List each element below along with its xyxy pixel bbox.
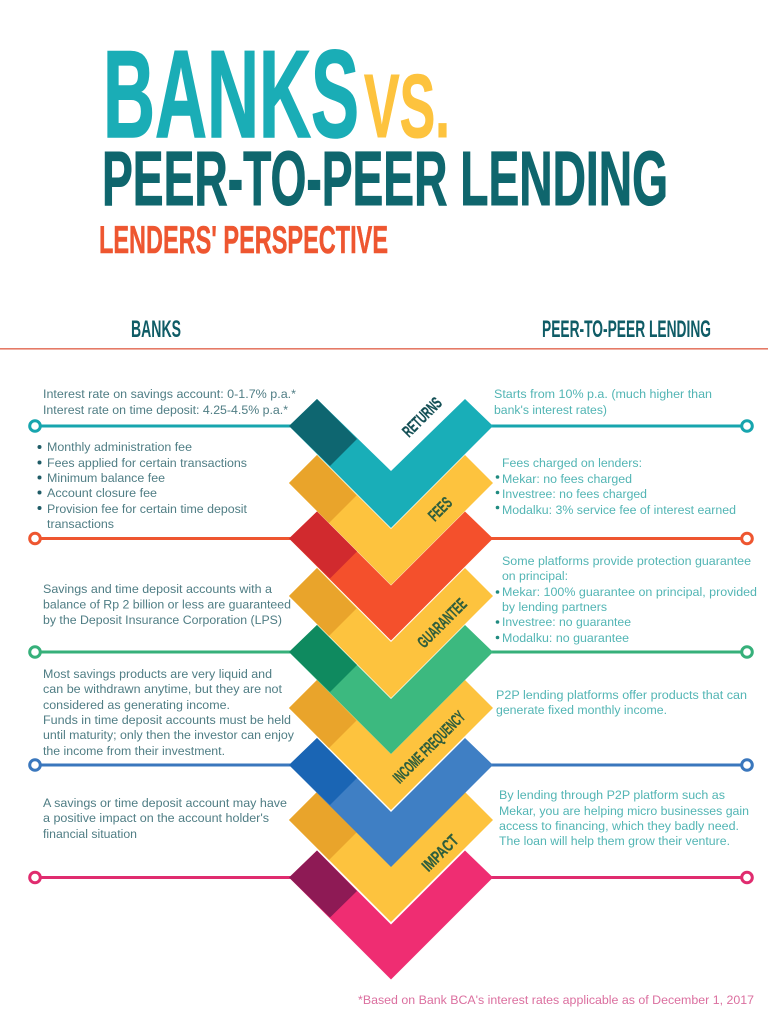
p2p text: fees: Fees charged on lenders:: [502, 456, 642, 470]
banks text: impact: financial situation: [43, 827, 137, 841]
banks text: income frequency: the income from their investment.: [43, 744, 225, 758]
p2p text: fees: Investree: no fees charged: [502, 487, 647, 501]
connector lines: income frequency: [30, 760, 752, 770]
banks text: fees: Minimum balance fee: [47, 471, 165, 485]
chevron: fees, yellow: [289, 455, 493, 585]
banks text: returns: [43, 387, 296, 417]
title line: Banks: BANKS: [103, 26, 359, 164]
p2p text: guarantee: by lending partners: [502, 600, 607, 614]
p2p text: returns: bank's interest rates): [494, 403, 607, 417]
banks text: returns: Interest rate on savings account: 0-1.7% p.a.*: [43, 387, 296, 401]
chevron: impact, pink: [289, 850, 493, 980]
connector lines: impact: [30, 872, 752, 883]
p2p text: guarantee: on principal:: [502, 569, 568, 583]
banks text: fees: Account closure fee: [47, 486, 157, 500]
p2p text: income frequency: generate fixed monthly income.: [496, 703, 667, 717]
banks text: income frequency: Most savings products are very liquid and: [43, 667, 272, 681]
chevron: guarantee, yellow: [289, 568, 493, 698]
p2p text: impact: access to financing, which they badly need.: [499, 819, 739, 833]
banks text: income frequency: can be withdrawn anytime, but they are not: [43, 682, 283, 696]
banks text: guarantee: by the Deposit Insurance Corporation (LPS): [43, 613, 282, 627]
p2p text: fees: Mekar: no fees charged: [502, 472, 632, 486]
banks text: impact: A savings or time deposit account may have: [43, 796, 287, 810]
p2p text: income frequency: [496, 688, 747, 717]
p2p text: income frequency: P2P lending platforms offer products that can: [496, 688, 747, 702]
column heading: banks: BANKS: [131, 316, 181, 343]
connector lines: fees: [30, 533, 752, 544]
p2p text: guarantee: [496, 554, 757, 645]
banks text: income frequency: Funds in time deposit accounts must be held: [43, 713, 291, 727]
banks text: fees: [38, 440, 248, 531]
banks text: fees: transactions: [47, 517, 114, 531]
banks text: income frequency: considered as generating income.: [43, 698, 230, 712]
banks text: returns: Interest rate on time deposit: 4.25-4.5% p.a.*: [43, 403, 288, 417]
chevron: income frequency, yellow: [289, 680, 493, 810]
banks text: guarantee: [43, 582, 291, 627]
p2p text: returns: Starts from 10% p.a. (much higher than: [494, 387, 712, 401]
chevron label: fees: FEES: [425, 494, 456, 525]
banks text: fees: Fees applied for certain transactions: [47, 456, 247, 470]
subtitle: LENDERS' PERSPECTIVE: [99, 219, 388, 262]
chevron: income frequency, blue: [289, 738, 493, 867]
banks text: guarantee: balance of Rp 2 billion or less are guaranteed: [43, 598, 291, 612]
banks text: income frequency: [43, 667, 295, 758]
chevron label: returns: RETURNS: [399, 394, 446, 441]
title word: vs.: VS.: [364, 57, 450, 157]
chevron: impact, yellow: [289, 792, 493, 922]
banks text: fees: Monthly administration fee: [47, 440, 192, 454]
banks text: income frequency: until maturity; only then the investor can enjoy: [43, 728, 295, 742]
banks text: fees: Provision fee for certain time deposit: [47, 502, 248, 516]
banks text: impact: [43, 796, 287, 841]
chevron: guarantee, green: [289, 625, 493, 754]
title: [99, 26, 668, 262]
chevron: fees, red-orange: [289, 512, 493, 640]
footnote: *Based on Bank BCA's interest rates applicable as of December 1, 2017: [358, 993, 754, 1007]
banks text: impact: a positive impact on the account holder's: [43, 811, 269, 825]
p2p text: fees: [496, 456, 736, 517]
p2p text: impact: [499, 788, 749, 848]
banks text: guarantee: Savings and time deposit accounts with a: [43, 582, 272, 596]
p2p text: guarantee: Mekar: 100% guarantee on principal, provided: [502, 585, 757, 599]
connector lines: returns: [30, 421, 752, 431]
connector lines: guarantee: [30, 647, 752, 657]
chevron label: impact: IMPACT: [419, 832, 462, 875]
p2p text: guarantee: Modalku: no guarantee: [502, 631, 629, 645]
chevron label: guarantee: GUARANTEE: [414, 595, 471, 652]
p2p text: guarantee: Investree: no guarantee: [502, 615, 631, 629]
chevron: returns, teal: [289, 399, 493, 528]
p2p text: guarantee: Some platforms provide protection guarantee: [502, 554, 751, 568]
p2p text: fees: Modalku: 3% service fee of interest earned: [502, 503, 736, 517]
p2p text: impact: By lending through P2P platform such as: [499, 788, 725, 802]
p2p text: impact: Mekar, you are helping micro businesses gain: [499, 804, 749, 818]
chevron label: income frequency: INCOME FREQUENCY: [390, 708, 469, 787]
p2p text: returns: [494, 387, 712, 417]
p2p text: impact: The loan will help them grow their venture.: [499, 834, 730, 848]
